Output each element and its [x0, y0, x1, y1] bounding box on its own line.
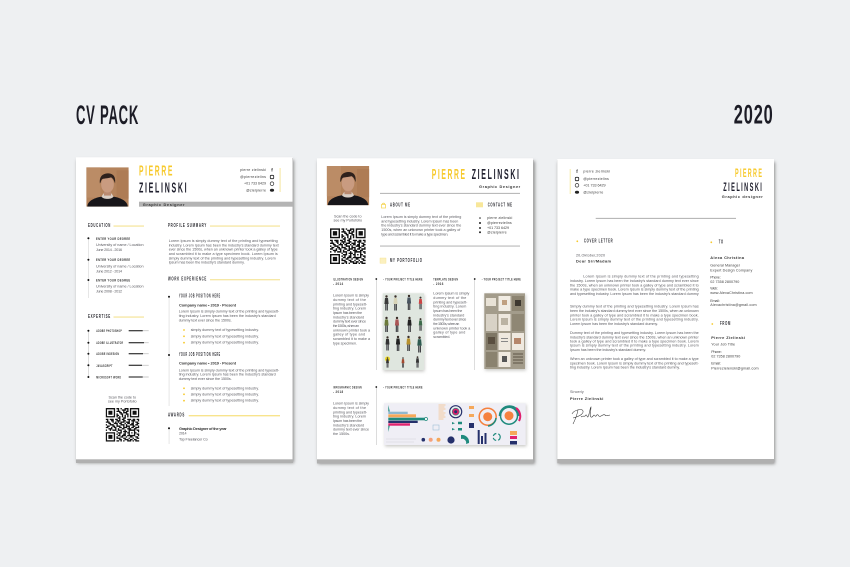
project: infographic text: - 2018 [333, 389, 344, 394]
recipient details: Phone : [710, 275, 721, 279]
name: PIERRE [432, 167, 467, 183]
education timeline: University of name / Location [96, 243, 144, 247]
work experience timeline: simply dummy text of typesetting industry. [191, 399, 259, 403]
contact details: f [576, 169, 578, 174]
contact details: f [271, 168, 273, 172]
recipient details: Web : [710, 286, 718, 290]
contact details: +01 733 6429 [244, 182, 266, 186]
recipient details [710, 255, 757, 307]
project: illustration text: galley of type and [333, 333, 365, 337]
panel: cover letter page: ZIELINSKI [723, 180, 763, 194]
signature [572, 407, 610, 424]
letter body: Lorem Ipsum has been the industry's standard dummy. [570, 322, 658, 326]
sender details: Phone : [711, 350, 722, 354]
education timeline: June 2008 - 2012 [96, 289, 122, 293]
contact details [570, 169, 610, 194]
image: fashion illustrations [383, 293, 424, 372]
contact details: @pierrezielins [240, 175, 266, 179]
qr block: Scan the code to [108, 396, 136, 400]
letter body: and typesetting industry. Lorem Ipsum has been the industry's standard dummy [570, 292, 699, 296]
contact details: @zielpierre [583, 190, 603, 194]
recipient details: Alexachristina@gmail.com [710, 303, 757, 307]
work experience timeline: dummy text ever since the 1500s. [179, 377, 232, 381]
letter body: the 1500s, when an unknown printer took a galley of type and scrambled it to [570, 283, 699, 287]
project: infographic text: the 1500s. [333, 432, 350, 436]
letter body: Simply dummy text of the printing and typesetting industry. Lorem Ipsum has [570, 305, 699, 309]
project: template text: galley of type and [433, 331, 465, 335]
grey job title band [139, 202, 293, 207]
work experience timeline: simply dummy text of typesetting industry. [191, 334, 259, 338]
project: illustration heading and divider: - YOUR PROJECT TITLE HERE [383, 276, 423, 282]
about text: and typesetting industry. Lorem Ipsum has been [381, 219, 458, 223]
heading: work experience: WORK EXPERIENCE [168, 277, 207, 283]
letter body: make a type specimen book. Lorem Ipsum is simply dummy text of the printing [570, 288, 699, 292]
photo [327, 166, 369, 205]
project: template heading and divider [474, 276, 521, 370]
education timeline: June 2014 - 2016 [96, 248, 122, 252]
heading: cover letter [576, 238, 613, 244]
name [722, 166, 763, 199]
qr block [330, 215, 366, 264]
image: infographic sample [384, 403, 526, 446]
heading: cover letter: COVER LETTER [584, 238, 613, 244]
title: 2020: 2020 [734, 100, 774, 130]
project: infographic text: Lorem Ipsum is simply [333, 402, 369, 406]
letter greeting: Dear Sir/Madam [576, 258, 612, 264]
project: template text: Lorem Ipsum is simply [433, 292, 469, 296]
sign-off: Sincerly [570, 390, 584, 394]
project: template text: ting industry. Lorem [433, 305, 466, 309]
letter greeting: 20,Oktober,2020 [576, 253, 605, 257]
work experience timeline: YOUR JOB POSITION HERE [179, 352, 221, 358]
profile text: Lorem Ipsum is simply dummy text of the printing and typesetting [169, 239, 278, 243]
work experience timeline: Lorem Ipsum is simply dummy text of the printing and typesett- [179, 310, 280, 314]
work experience timeline: Company name • 2019 - Present [179, 302, 237, 308]
contact list: +01 733 6429 [487, 226, 509, 230]
heading: profile summary [168, 223, 280, 229]
profile text: ever since the 1500s, when an unknown printer took a galley of type [169, 248, 278, 252]
skills list: MICROSOFT WORD [96, 374, 121, 380]
letter body: ting industry. Lorem Ipsum has been the industry's standard dummy. [570, 366, 680, 370]
sender details: Pierrezielenski@gmail.com [711, 366, 759, 370]
heading: work experience [168, 277, 280, 283]
project: illustration text: ting industry. Lorem [333, 307, 366, 311]
panel: portfolio page: ZIELINSKI [472, 167, 521, 183]
panel: portfolio page [317, 158, 535, 464]
project: illustration text: Ipsum has been the [333, 311, 362, 315]
project: template text: dummy text ever since [433, 318, 466, 322]
project: illustration text: Lorem Ipsum is simply [333, 294, 369, 298]
heading: to: TO [719, 239, 724, 245]
project: infographic text: printing and typesett- [333, 410, 368, 414]
work experience timeline [168, 294, 280, 406]
education timeline [87, 236, 144, 298]
recipient details: 02 7358 2800790 [710, 280, 739, 284]
profile text [169, 239, 279, 265]
qr block: Scan the code to [334, 215, 362, 219]
grey job title band: Graphic Designer [143, 202, 185, 207]
qr block: see my Portofolio [108, 400, 136, 404]
letter body: Lorem Ipsum is simply dummy text of the printing and typesetting [583, 275, 699, 279]
about me heading: ABOUT ME [390, 203, 411, 209]
heading: profile summary: PROFILE SUMMARY [168, 223, 207, 229]
project: template text: dummy text of the [433, 296, 466, 300]
project: illustration text: printing and typesett- [333, 302, 368, 306]
project: infographic text: industry's standard [333, 423, 364, 427]
project: infographic text: dummy text ever since [333, 428, 369, 432]
portfolio heading: MY PORTOFOLIO [390, 258, 423, 264]
letter body: industry's standard dummy text ever since the 1500s, when an unknown printer [570, 335, 699, 339]
profile text: and scrambled it to make a type specimen book. Lorem Ipsum is [169, 252, 278, 256]
awards entry: Graphic Designer of the year [179, 426, 227, 431]
project: illustration text: scrambled it to make a [333, 337, 371, 341]
project: template text: industry's standard [433, 313, 464, 317]
letter body [570, 275, 699, 370]
awards entry [168, 426, 227, 444]
skills list: JAVASCRIPT [96, 363, 113, 368]
project: template text [433, 276, 471, 339]
project: illustration text: dummy text ever since [333, 320, 366, 324]
job title: Graphic Designer [479, 184, 521, 189]
education timeline: University of name / Location [96, 264, 144, 268]
recipient details: Alexa Christina [710, 255, 745, 260]
education timeline: University of name / Location [96, 284, 144, 288]
letter body: printer took a galley of type and scrambled it to make a type specimen book. [570, 313, 699, 317]
panel: cover letter page: PIERRE [735, 166, 763, 180]
project: illustration text: unknown printer took a [333, 328, 371, 332]
work experience timeline: ting industry. Lorem Ipsum has been the industry's standard [179, 314, 276, 318]
project: template text: TEMPLATE DESIGN [433, 276, 458, 282]
project: illustration heading and divider [375, 276, 423, 370]
education timeline: ENTER YOUR DEGREE [96, 278, 130, 282]
skills list: ADOBE PHOTOSHOP [96, 328, 122, 333]
contact details: @pierrezielins [583, 177, 609, 181]
letter body: industry. Lorem Ipsum has been the industry's standard dummy text ever since [570, 279, 699, 283]
project: illustration text: type specimen. [333, 341, 357, 345]
about text: type and scrambled it to make a type specimen. [381, 233, 448, 237]
heading: awards: AWARDS [168, 413, 185, 419]
project: illustration text [333, 276, 371, 345]
project: template text: Ipsum has been the [433, 309, 462, 313]
recipient details: Email : [710, 299, 720, 303]
work experience timeline: Company name • 2019 - Present [179, 360, 237, 366]
sender details: Pierre Zielinski [711, 335, 745, 340]
work experience timeline: simply dummy text of typesetting industry. [191, 328, 259, 332]
sender details [711, 335, 759, 370]
heading: education: EDUCATION [88, 223, 111, 229]
project: template text: unknown printer took a [433, 326, 471, 330]
sender details: 02 7358 2800790 [711, 355, 740, 359]
awards entry: Top Freelancer Co [179, 438, 208, 442]
sign-off: Pierre Zielinski [570, 396, 603, 401]
profile text: Ipsum has been the industry's standard dummy. [169, 261, 245, 265]
project: infographic text: ting industry. Lorem [333, 415, 366, 419]
project: infographic text: dummy text of the [333, 406, 366, 410]
heading: expertise: EXPERTISE [88, 314, 111, 320]
work experience timeline: Lorem Ipsum is simply dummy text of the printing and typesett- [179, 368, 280, 372]
text: CV PACK [76, 100, 139, 130]
project: illustration text: - 2014 [333, 281, 344, 286]
awards entry: 2014 [179, 432, 186, 436]
contact list [479, 216, 512, 234]
contact me heading [476, 202, 513, 209]
about me heading [382, 203, 411, 209]
letter body: took a galley of type and scrambled it to make a type specimen book. Lorem [570, 340, 699, 344]
heading: awards [168, 413, 280, 419]
letter body: Ipsum has been the industry's standard dummy. [570, 348, 646, 352]
project: infographic text: INFOGRAPHIC DESIGN [333, 384, 362, 390]
project: infographic heading and divider: - YOUR PROJECT TITLE HERE [383, 384, 423, 390]
panel: cover letter page [557, 159, 775, 464]
qr block: see my Portofolio [334, 219, 362, 223]
contact list: @pierrezielins [487, 221, 512, 225]
heading: to [710, 239, 724, 245]
heading: from [711, 321, 731, 327]
name: PIERRE [139, 164, 174, 180]
profile text: simply dummy text of the printing and typesetting industry. Lorem [169, 256, 276, 260]
project: template text: - 2016 [433, 281, 444, 286]
project: template text: scrambled. [433, 335, 450, 339]
recipient details: Expert Design Company [710, 269, 752, 273]
work experience timeline: simply dummy text of typesetting industry. [191, 341, 259, 345]
qr block [106, 396, 139, 442]
project: illustration text: industry's standard [333, 315, 364, 319]
image: template pages [484, 293, 526, 370]
skills list: ADOBE ILLUSTRATOR [96, 340, 123, 345]
recipient details: General Manager [710, 264, 741, 268]
name: Graphic designer [722, 194, 763, 199]
letter body: been the industry's standard dummy text ever since the 1500s, when an unknown [570, 309, 699, 313]
project: infographic text: Ipsum has been the [333, 419, 362, 423]
sign-off [570, 390, 603, 401]
work experience timeline: simply dummy text of typesetting industry. [191, 386, 259, 390]
portfolio heading [380, 258, 423, 264]
letter body: Dummy text of the printing and typesetting industry. Lorem Ipsum has been the [570, 331, 699, 335]
panel: resume page: ZIELINSKI [139, 181, 188, 197]
sender details: Email : [711, 362, 721, 366]
project: illustration text: dummy text of the [333, 298, 366, 302]
about text [381, 215, 461, 237]
project: template text: printing and typesett- [433, 300, 468, 304]
contact details: +01 733 6429 [583, 183, 606, 187]
contact details [240, 168, 281, 192]
photo [86, 167, 129, 207]
education timeline: June 2012 - 2014 [96, 269, 122, 273]
recipient details: www.AlexaChristina.com [710, 291, 753, 295]
letter body: When an unknown printer took a galley of type and scrambled it to make a type [570, 357, 699, 361]
about text: 1500s, when an unknown printer took a galley of [381, 228, 461, 232]
panel: resume page [76, 157, 294, 463]
letter greeting [576, 253, 612, 264]
profile text: industry. Lorem Ipsum has been the industry's standard dummy text [169, 243, 279, 247]
skills list [87, 328, 149, 380]
contact list: @zielpierre [487, 230, 507, 234]
letter body: Lorem Ipsum is simply dummy text of the printing and typesetting industry. [570, 318, 699, 322]
project: template heading and divider: - YOUR PROJECT TITLE HERE [482, 276, 521, 282]
name [139, 164, 188, 197]
letter body: Ipsum is simply dummy text of the printing and typesetting industry. Lorem [570, 344, 699, 348]
work experience timeline: simply dummy text of typesetting industry. [191, 392, 259, 396]
education timeline: ENTER YOUR DEGREE [96, 236, 130, 241]
work experience timeline: ting industry. Lorem Ipsum has been the industry's standard [179, 373, 276, 377]
contact list: pierre zielinski [487, 216, 512, 220]
work experience timeline: dummy text ever since the 1500s. [179, 318, 232, 322]
skills list: ADOBE INDESIGN [96, 351, 119, 356]
project: infographic text [333, 384, 369, 436]
project: illustration text: the 1500s, when an [333, 324, 359, 328]
work experience timeline: YOUR JOB POSITION HERE [179, 294, 221, 300]
about text: the industry's standard dummy text ever since the [381, 224, 461, 228]
contact details: @zielpierre [246, 188, 266, 192]
contact details: pierre zielinski [583, 169, 610, 173]
project: infographic heading and divider [375, 384, 423, 445]
project: illustration text: ILLUSTRATION DESIGN [333, 276, 363, 282]
heading: from: FROM [720, 321, 731, 327]
education timeline: ENTER YOUR DEGREE [96, 257, 130, 262]
about text: Lorem Ipsum is simply dummy text of the printing [381, 215, 461, 219]
sender details: Your Job Title [711, 343, 735, 347]
letter body: specimen book. Lorem Ipsum is simply dummy text of the printing and typesett- [570, 361, 699, 365]
contact me heading: CONTACT ME [488, 203, 513, 209]
contact details: pierre zielinski [240, 168, 266, 172]
project: template text: the 1500s, when an [433, 322, 459, 326]
